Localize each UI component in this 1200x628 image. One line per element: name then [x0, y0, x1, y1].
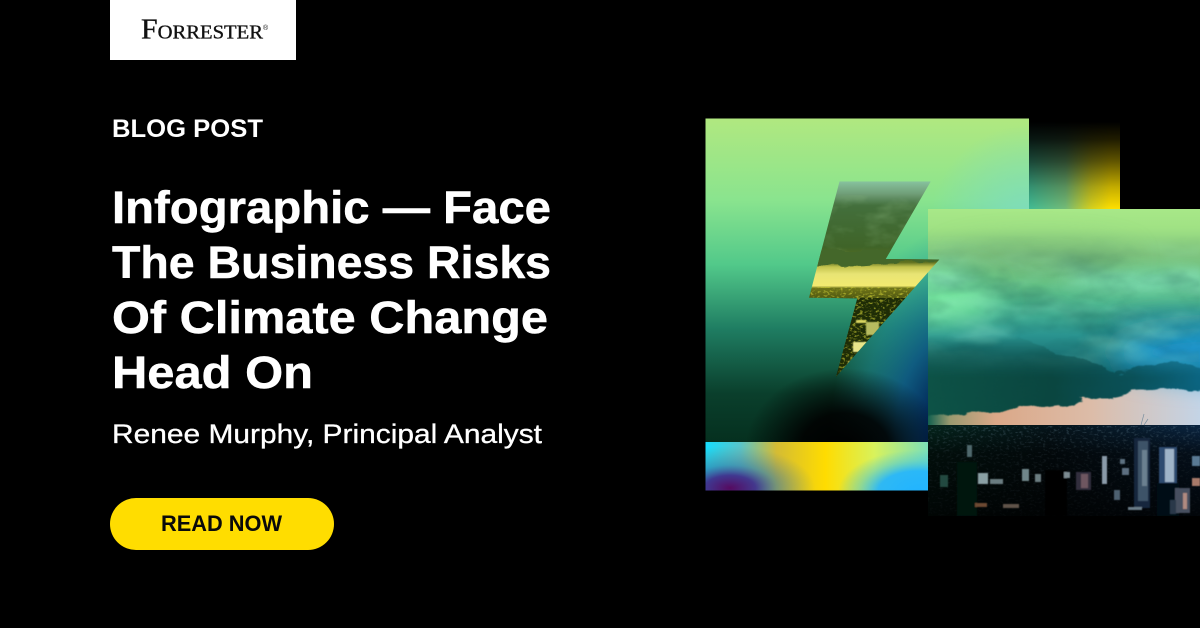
logo: Forrester: FORRESTER [141, 14, 264, 46]
photo: storm over city [928, 209, 1200, 516]
button: read now: READ NOW [161, 511, 282, 536]
button: read now [110, 498, 334, 550]
logo: Forrester [110, 0, 296, 60]
sky and storm cloud [928, 209, 1200, 425]
banner canvas [110, 0, 1200, 550]
author byline: Renee Murphy, Principal Analyst [112, 419, 543, 449]
title: The Business Risks [112, 237, 551, 288]
city skyline [928, 414, 1200, 516]
gradient band under panel [706, 442, 928, 490]
icon: lightning bolt with city photo [809, 182, 940, 376]
title: Infographic — Face [112, 182, 551, 233]
eyebrow: blog post: BLOG POST [112, 115, 263, 143]
corner gradient square [1029, 119, 1120, 209]
title: Head On [112, 347, 313, 398]
title: Of Climate Change [112, 292, 548, 343]
title [112, 182, 551, 398]
logo: Forrester: ® [263, 24, 269, 32]
panel: green gradient [706, 118, 1029, 442]
